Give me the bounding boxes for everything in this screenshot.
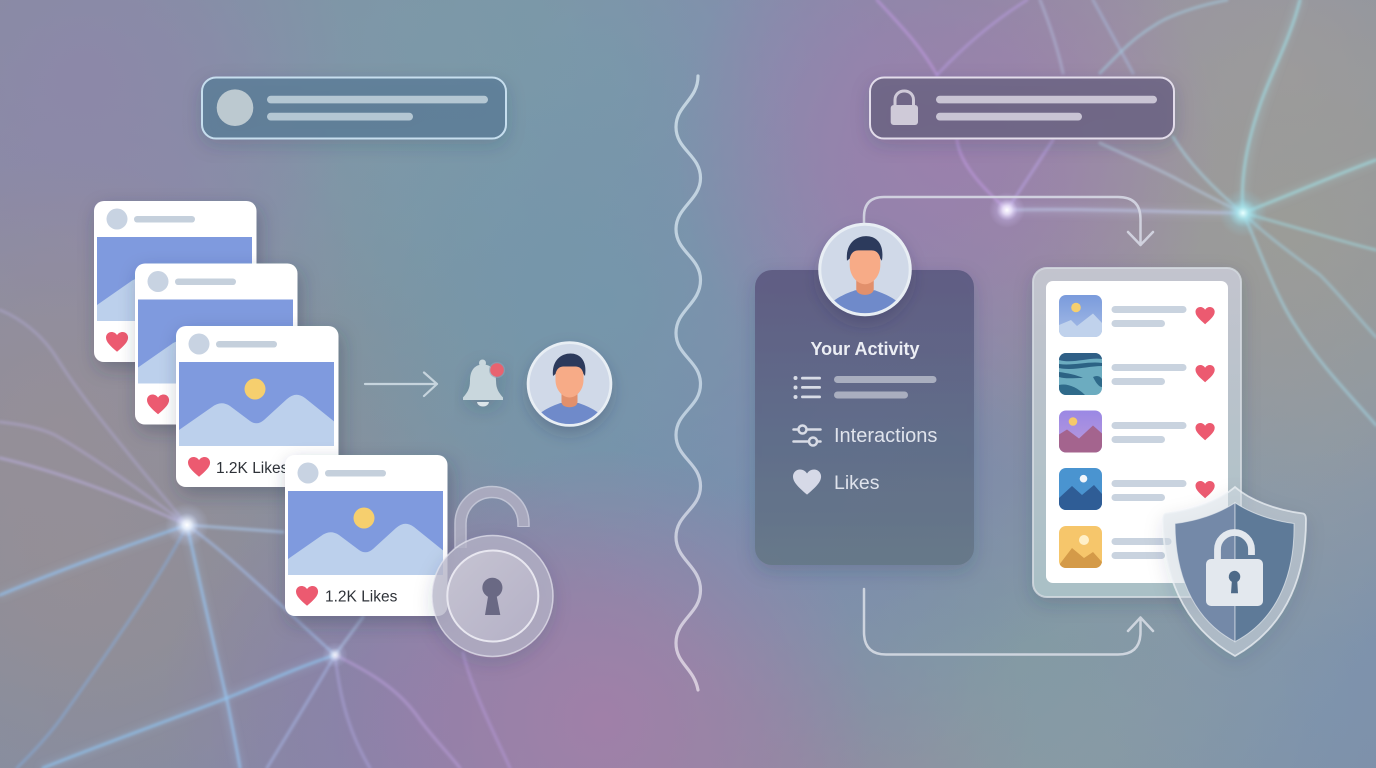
icon: padlock: [891, 91, 918, 125]
row 1: [1059, 295, 1215, 337]
interactions label: Interactions: [834, 425, 937, 447]
icon: sliders: [794, 426, 820, 446]
left header bar: [202, 78, 506, 138]
thumbnail 4: [1059, 468, 1102, 510]
post card 3: [176, 326, 338, 487]
connector arrow bottom: [864, 589, 1153, 654]
thumbnail 3: [1059, 410, 1102, 452]
avatar placeholder: [217, 89, 253, 126]
open padlock: [432, 492, 553, 656]
user avatar left: [527, 341, 612, 433]
panel: liked posts phone: [1033, 268, 1241, 597]
header text lines: [936, 96, 1157, 120]
thumbnail 2: [1059, 353, 1102, 395]
shield inner left: [1175, 503, 1235, 642]
right header bar: [870, 78, 1174, 138]
post card 2: [135, 264, 298, 424]
likes count: 1.2K Likes: [216, 460, 289, 477]
shield inner right: [1235, 503, 1294, 642]
likes label: Likes: [834, 472, 880, 494]
heading: Your Activity: [810, 339, 920, 359]
connector arrow top: [864, 197, 1153, 245]
shield outer glass: [1163, 487, 1306, 656]
wavy center divider: [676, 76, 700, 690]
post card 1: [94, 201, 256, 362]
row 3: [1059, 410, 1215, 452]
row 2: [1059, 353, 1215, 395]
thumbnail 5: [1059, 526, 1102, 568]
icon: heart: [188, 457, 210, 477]
icon: padlock: [1206, 532, 1263, 606]
user avatar right: [818, 223, 912, 323]
icon: heart: [147, 394, 169, 414]
icon: notification bell: [463, 360, 505, 406]
thumbnail 1: [1059, 295, 1102, 337]
row 4: [1059, 468, 1215, 510]
keyhole: [482, 578, 502, 615]
lock body outer ring: [432, 536, 553, 656]
header text lines: [267, 96, 488, 120]
security shield: [1163, 487, 1306, 656]
arrow to notification: [365, 372, 437, 396]
activity text lines: [834, 376, 936, 398]
icon: heart: [793, 470, 821, 495]
panel: your activity: [755, 270, 974, 565]
icon: heart: [106, 332, 128, 352]
lock shackle: [460, 492, 524, 548]
icon: list: [794, 376, 821, 399]
lock body inner disc: [447, 550, 538, 642]
icon: heart: [296, 586, 318, 606]
row 5: [1059, 526, 1172, 568]
likes count: 1.2K Likes: [325, 588, 398, 606]
post card 4: [285, 455, 448, 616]
